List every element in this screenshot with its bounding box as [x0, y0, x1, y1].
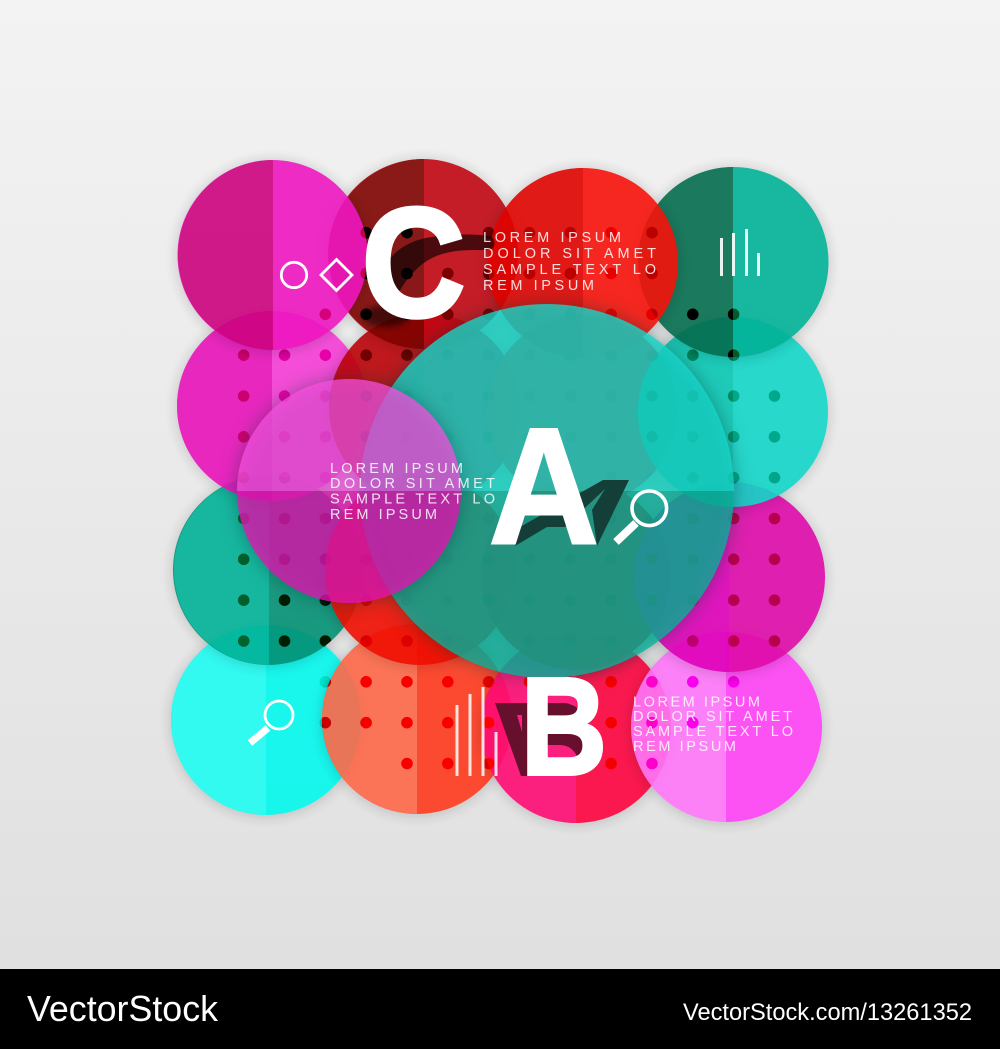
purple circle [237, 379, 461, 603]
text block: upper right: DOLOR SIT AMET [483, 246, 656, 262]
circle: red row 1 [488, 168, 678, 358]
circle: coral row 4 [322, 624, 512, 814]
circle: light magenta row 4 [631, 632, 822, 822]
text block: purple circle [330, 461, 495, 523]
circle: red centre row 3 [481, 480, 671, 670]
text block: lower right [633, 694, 793, 755]
circle: magenta row 3 [634, 482, 825, 672]
footer bar [0, 969, 1000, 1049]
text block: lower right: SAMPLE TEXT LO [633, 724, 793, 740]
circle: teal row 3 [173, 475, 363, 665]
footer logo: VectorStock [27, 988, 219, 1029]
text block: upper right: REM IPSUM [483, 278, 594, 294]
text block: purple circle: REM IPSUM [330, 507, 437, 523]
icon: diamond outline [321, 260, 352, 290]
circle: teal row 1 [638, 167, 828, 357]
letter A: A [489, 393, 599, 578]
large teal circle [360, 304, 734, 678]
circle: cyan row 4 [171, 625, 361, 815]
icon: bar lines lower [456, 687, 498, 776]
circle: red row 3 [325, 475, 515, 665]
circle: dark red row 1 [328, 159, 518, 349]
letter C: C [362, 175, 465, 349]
circle: red centre row 2 [487, 315, 677, 505]
icon: magnifier large [616, 491, 667, 542]
icon: bar lines upper right [720, 229, 760, 276]
text block: upper right [483, 230, 656, 294]
letter B: B [521, 650, 607, 804]
text block: lower right: DOLOR SIT AMET [633, 709, 792, 725]
text block: upper right: SAMPLE TEXT LO [483, 262, 656, 278]
text block: upper right: LOREM IPSUM [483, 230, 621, 246]
icon: circle outline [281, 262, 307, 288]
footer url: VectorStock.com/13261352 [683, 999, 972, 1026]
circle: magenta row 1 [178, 160, 368, 350]
text block: lower right: REM IPSUM [633, 739, 736, 755]
circle grid [171, 159, 828, 823]
text block: lower right: LOREM IPSUM [633, 694, 760, 710]
icon: magnifier cyan circle [250, 701, 293, 743]
circle: pink row 4 [481, 633, 671, 823]
letter C shadow [362, 234, 494, 327]
circle: turquoise row 2 [638, 317, 828, 507]
text block: purple circle: SAMPLE TEXT LO [330, 492, 495, 508]
circle: magenta row 2 [177, 311, 367, 501]
text block: purple circle: DOLOR SIT AMET [330, 476, 495, 492]
text block: purple circle: LOREM IPSUM [330, 461, 463, 477]
letter B shadow [495, 703, 585, 776]
dot grid [244, 233, 775, 763]
circle: crimson row 2 [329, 313, 520, 503]
letter A shadow [515, 480, 629, 546]
